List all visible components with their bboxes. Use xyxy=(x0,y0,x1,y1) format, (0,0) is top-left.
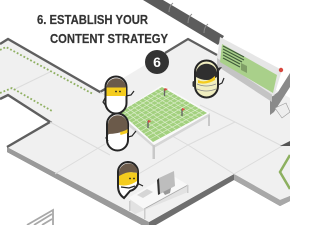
title: 6. ESTABLISH YOUR xyxy=(37,13,148,27)
step number badge: 6 xyxy=(153,54,161,70)
step number badge xyxy=(145,50,169,74)
person: middle left xyxy=(106,114,136,150)
person: top left xyxy=(103,76,134,114)
green hexagon marker xyxy=(280,155,290,189)
person: back-facing in black xyxy=(192,60,224,98)
railing xyxy=(27,210,53,225)
dark corner wedge xyxy=(280,141,290,146)
table with green grid xyxy=(118,85,210,159)
floor plan xyxy=(0,39,290,229)
flags xyxy=(148,88,186,128)
monitor xyxy=(157,171,175,195)
person: at desk xyxy=(118,162,143,198)
keyboard xyxy=(137,189,153,198)
desk with monitor xyxy=(128,171,188,219)
pipe xyxy=(143,0,224,45)
title xyxy=(37,13,169,46)
title: CONTENT STRATEGY xyxy=(50,32,169,46)
control panel xyxy=(217,37,290,118)
